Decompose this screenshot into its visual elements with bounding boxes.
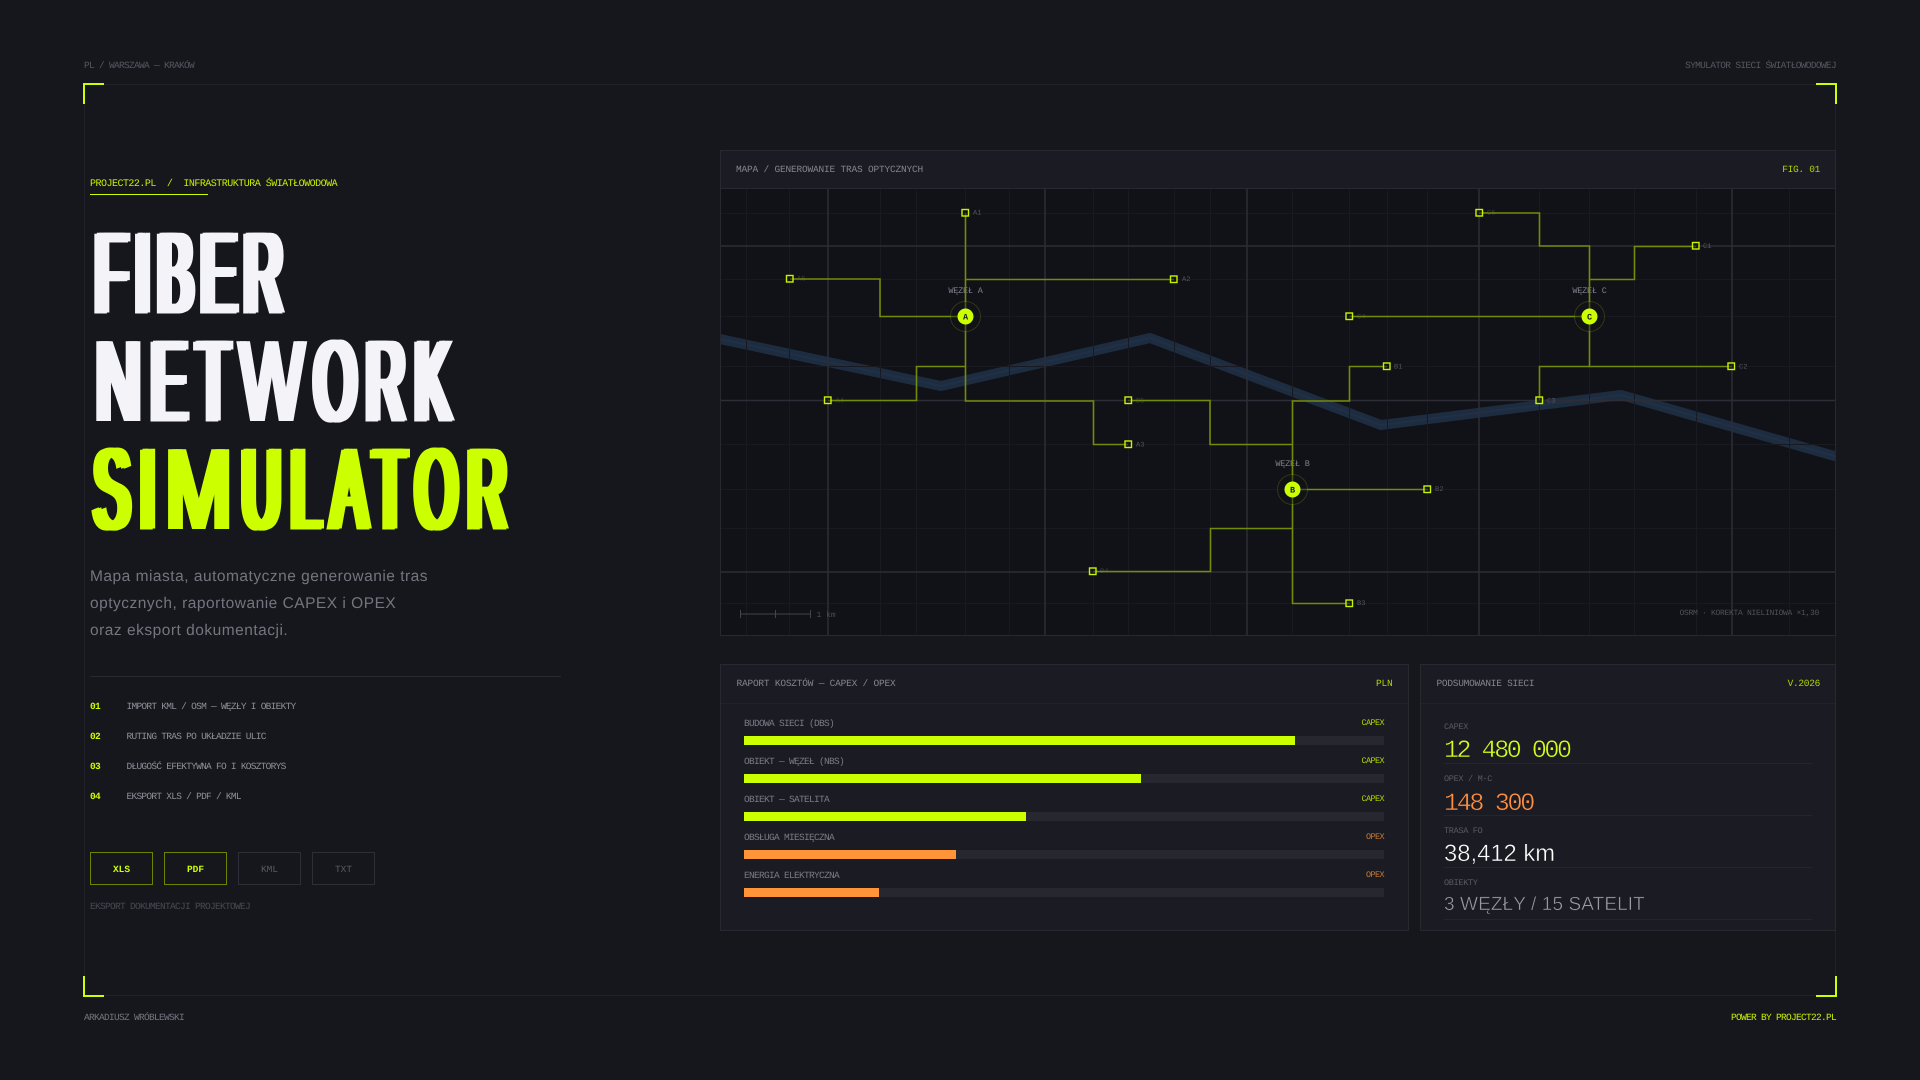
bar chart: costs — [744, 718, 1384, 897]
satellite labels: A3 — [1136, 442, 1144, 450]
bar row: energia elektryczna: ENERGIA ELEKTRYCZNA — [744, 870, 839, 880]
cost report heading: RAPORT KOSZTÓW — CAPEX / OPEX — [736, 678, 895, 689]
feature list: DŁUGOŚĆ EFEKTYWNA FO I KOSZTORYS — [126, 760, 286, 772]
frame — [84, 84, 1836, 996]
top left location label: PL / WARSZAWA — KRAKÓW — [84, 60, 194, 71]
summary heading: PODSUMOWANIE SIECI — [1436, 678, 1534, 689]
satellite labels: B5 — [1136, 398, 1144, 406]
description: optycznych, raportowanie CAPEX i OPEX — [90, 594, 396, 612]
satellite labels: C3 — [1547, 398, 1555, 406]
footer author: ARKADIUSZ WRÓBLEWSKI — [84, 1012, 184, 1023]
eyebrow: PROJECT22.PL / INFRASTRUKTURA ŚWIATŁOWODOWA — [90, 178, 337, 190]
export button: XLS — [90, 852, 153, 885]
feature list: IMPORT KML / OSM — WĘZŁY I OBIEKTY — [126, 700, 296, 712]
bar row: budowa sieci: BUDOWA SIECI (DBS) — [744, 718, 834, 728]
satellite labels: B4 — [1100, 568, 1108, 576]
stat: route length — [1444, 826, 1555, 867]
export button: TXT: TXT — [335, 864, 352, 875]
stat: objects — [1444, 878, 1645, 915]
major grid — [721, 189, 1836, 636]
description: oraz eksport dokumentacji. — [90, 622, 288, 638]
satellite labels: A2 — [1182, 276, 1190, 284]
description — [90, 568, 428, 638]
bar row: obsluga miesieczna: OPEX — [1366, 832, 1384, 842]
satellite labels: A5 — [797, 276, 805, 284]
satellite labels: C4 — [1357, 314, 1365, 322]
corner bracket: bottom left — [83, 976, 104, 997]
bar row: obiekt satelita: OBIEKT — SATELITA — [744, 794, 829, 804]
bar row: obiekt satelita: CAPEX — [1361, 794, 1384, 804]
figure tag: FIG. 01 — [1782, 164, 1820, 175]
stat: opex — [1444, 774, 1534, 818]
map header — [721, 151, 1835, 189]
title line: NETWORK: W — [239, 316, 317, 446]
stat: route length: 38,412 km — [1444, 840, 1555, 867]
satellite labels: B3 — [1357, 600, 1365, 608]
node C: C — [1587, 312, 1592, 322]
satellite labels: C1 — [1703, 243, 1711, 251]
river — [715, 338, 1845, 459]
bar row: obsluga miesieczna — [744, 832, 1384, 859]
scale bar — [740, 610, 836, 620]
panel: map — [720, 150, 1836, 636]
top right system label: SYMULATOR SIECI ŚWIATŁOWODOWEJ — [1685, 60, 1836, 71]
stat: capex: CAPEX — [1444, 722, 1468, 732]
version tag: V.2026 — [1788, 678, 1820, 689]
divider — [90, 676, 561, 677]
node A — [950, 302, 980, 332]
node C — [1574, 302, 1604, 332]
bar row: obiekt wezel: CAPEX — [1361, 756, 1384, 766]
title line: NETWORK: N — [96, 316, 152, 446]
bar row: energia elektryczna: OPEX — [1366, 870, 1384, 880]
bar row: obiekt wezel — [744, 756, 1384, 783]
feature 03: 03 — [90, 760, 100, 772]
stat: opex: OPEX / M-C — [1444, 774, 1492, 784]
node labels — [948, 286, 1607, 469]
node labels: WĘZEŁ C — [1572, 286, 1607, 296]
routing note: OSRM · KOREKTA NIELINIOWA ×1,30 — [1679, 609, 1819, 618]
stat: route length: TRASA FO — [1444, 826, 1482, 836]
corner bracket: top left — [83, 83, 104, 104]
stat: capex: 12 480 000 — [1444, 736, 1570, 765]
satellite labels: A1 — [973, 210, 981, 218]
node B: B — [1290, 486, 1295, 496]
stat: capex — [1444, 722, 1570, 765]
title line: FIBER: FIBER — [95, 208, 290, 338]
export button: PDF — [164, 852, 227, 885]
currency tag: PLN — [1376, 678, 1392, 689]
satellite labels — [797, 210, 1747, 608]
bar row: budowa sieci — [744, 718, 1384, 745]
satellite labels: B2 — [1435, 486, 1443, 494]
bar row: energia elektryczna — [744, 870, 1384, 897]
map chart — [721, 189, 1835, 635]
node labels: WĘZEŁ B — [1275, 459, 1310, 469]
export button: XLS: XLS — [113, 864, 130, 875]
cost report header — [721, 665, 1408, 704]
export button: TXT — [312, 852, 375, 885]
footer credit: POWER BY PROJECT22.PL — [1731, 1012, 1836, 1023]
satellite labels: C2 — [1739, 364, 1747, 372]
export button: KML: KML — [261, 864, 278, 875]
feature list: EKSPORT XLS / PDF / KML — [126, 790, 241, 802]
node labels: WĘZEŁ A — [948, 286, 984, 296]
bar row: obiekt wezel: OBIEKT — WĘZEŁ (NBS) — [744, 756, 844, 766]
stat: objects: 3 WĘZŁY / 15 SATELIT — [1444, 894, 1645, 915]
export caption: EKSPORT DOKUMENTACJI PROJEKTOWEJ — [90, 901, 250, 912]
satellite labels: B1 — [1394, 364, 1402, 372]
satellite markers — [786, 210, 1734, 606]
corner bracket: top right — [1816, 83, 1837, 104]
feature list: RUTING TRAS PO UKŁADZIE ULIC — [126, 730, 266, 742]
satellite labels: A4 — [836, 398, 844, 406]
title line: NETWORK: ET ORK — [151, 316, 460, 446]
map heading: MAPA / GENEROWANIE TRAS OPTYCZNYCH — [736, 164, 923, 175]
summary header — [1421, 665, 1835, 704]
bar row: budowa sieci: CAPEX — [1361, 718, 1384, 728]
minor grid — [721, 189, 1836, 636]
node B — [1278, 474, 1308, 504]
export button: KML — [238, 852, 301, 885]
bar row: obsluga miesieczna: OBSŁUGA MIESIĘCZNA — [744, 832, 834, 842]
feature list — [90, 700, 296, 802]
satellite labels: C5 — [1487, 210, 1495, 218]
fiber routes — [790, 213, 1732, 604]
description: Mapa miasta, automatyczne generowanie tras — [90, 568, 428, 584]
eyebrow underline — [90, 194, 208, 195]
corner bracket: bottom right — [1816, 976, 1837, 997]
scale bar: 1 km — [816, 611, 836, 620]
title — [91, 208, 516, 554]
feature 02: 02 — [90, 730, 100, 742]
feature 04: 04 — [90, 790, 100, 802]
node A: A — [963, 312, 969, 322]
stat: opex: 148 300 — [1444, 788, 1533, 818]
feature 01: 01 — [90, 700, 100, 712]
bar row: obiekt satelita — [744, 794, 1384, 821]
export button: PDF: PDF — [187, 864, 204, 875]
panel: network summary — [1420, 664, 1836, 931]
title line: SIMULATOR: M — [165, 424, 247, 554]
stat: objects: OBIEKTY — [1444, 878, 1478, 888]
title line: SIMULATOR: SI ULATOR — [94, 424, 516, 554]
panel: cost report — [720, 664, 1409, 931]
